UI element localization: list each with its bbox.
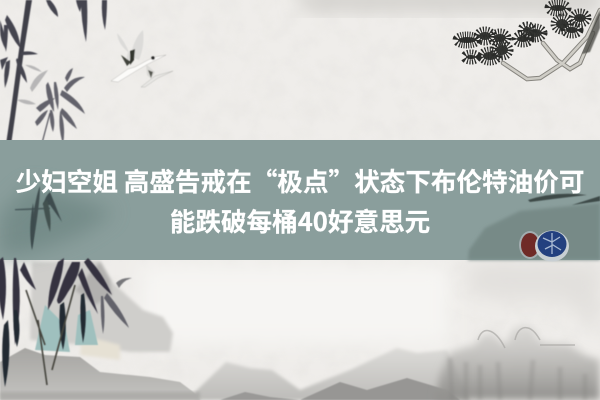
icon: ink seal and paste box <box>519 230 569 262</box>
title <box>16 162 584 239</box>
banner band <box>0 140 600 260</box>
icon: pine branch <box>458 5 600 79</box>
distant mountains lower right <box>195 262 600 400</box>
title: 少妇空姐 高盛告戒在“极点”状态下布伦特油价可 <box>16 162 584 199</box>
ink wash over band <box>0 185 600 260</box>
bamboo foreground lower left <box>0 257 132 387</box>
hills lower left <box>0 261 200 400</box>
ink bamboo top left <box>0 0 107 200</box>
icon: white cranes <box>111 30 173 87</box>
title: 能跌破每桶40好意思元 <box>170 202 430 239</box>
